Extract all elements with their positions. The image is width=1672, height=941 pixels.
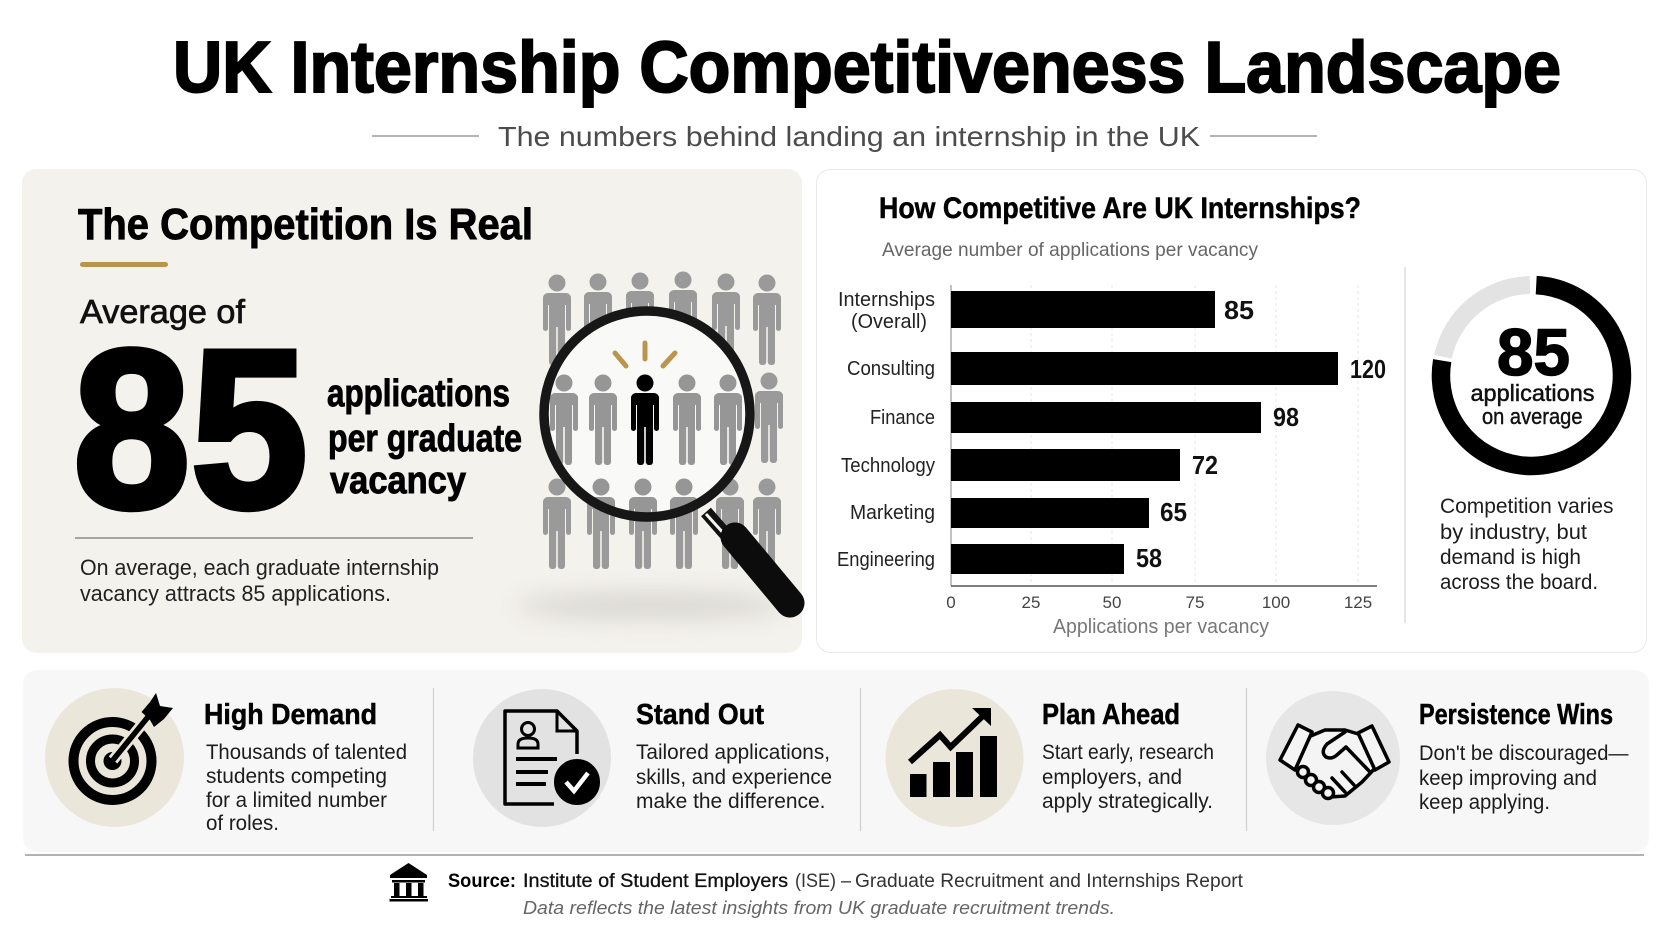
bar chart: 50 xyxy=(1103,593,1121,612)
big number caption: applications xyxy=(327,373,510,415)
donut chart: 85 xyxy=(1497,315,1570,389)
gold accent bar xyxy=(80,262,168,267)
donut note xyxy=(1440,494,1614,594)
takeaway: stand out: Stand Out xyxy=(636,699,764,731)
donut note: demand is high xyxy=(1440,545,1581,569)
illustration: crowd and magnifying glass xyxy=(515,272,790,619)
icon: rising bar chart xyxy=(886,689,1024,827)
source citation: Source: xyxy=(448,871,516,892)
bar chart: 85 xyxy=(1224,295,1254,325)
bar chart: 120 xyxy=(1350,354,1386,384)
takeaway: persistence wins: keep improving and xyxy=(1419,767,1597,790)
icon: resume with check xyxy=(473,689,611,827)
panel description: On average, each graduate internship xyxy=(80,555,439,580)
bar chart: Engineering xyxy=(837,549,935,571)
donut note: Competition varies xyxy=(1440,494,1614,518)
bar chart: 72 xyxy=(1192,450,1218,480)
panel heading: The Competition Is Real xyxy=(78,200,533,249)
icon: handshake xyxy=(1266,691,1400,825)
takeaway: plan ahead: apply strategically. xyxy=(1042,790,1213,813)
bar chart: 98 xyxy=(1273,402,1299,432)
bar chart: 125 xyxy=(1344,593,1372,612)
bar chart xyxy=(837,285,1386,638)
big number 85: 85 xyxy=(73,302,308,555)
takeaway: plan ahead xyxy=(886,689,1214,827)
panel: the competition is real xyxy=(22,169,802,653)
source citation: (ISE) – xyxy=(795,871,851,892)
icon: target with arrow xyxy=(45,688,184,827)
takeaway: persistence wins: Don't be discouraged— xyxy=(1419,742,1628,765)
takeaway: plan ahead: Plan Ahead xyxy=(1042,699,1180,731)
takeaway: high demand: students competing xyxy=(206,765,387,788)
big number caption: per graduate xyxy=(328,418,522,460)
data note: Data reflects the latest insights from UK graduate recruitment trends. xyxy=(523,897,1115,918)
takeaway: persistence wins: keep applying. xyxy=(1419,791,1550,814)
bar chart: 75 xyxy=(1186,593,1204,612)
donut chart xyxy=(1441,285,1622,466)
title: UK Internship Competitiveness Landscape xyxy=(173,28,1561,108)
panel description xyxy=(80,555,439,606)
icon: institution building xyxy=(390,863,428,902)
takeaway: plan ahead: Start early, research xyxy=(1042,741,1214,764)
source citation: Institute of Student Employers xyxy=(523,871,788,892)
donut note: by industry, but xyxy=(1440,520,1587,544)
bar chart: 58 xyxy=(1136,543,1162,573)
donut chart: on average xyxy=(1482,404,1582,429)
source citation: Graduate Recruitment and Internships Report xyxy=(855,871,1244,892)
bar chart: 25 xyxy=(1022,593,1040,612)
donut note: across the board. xyxy=(1440,570,1598,594)
bar chart: Technology xyxy=(841,455,935,477)
chart subheading: Average number of applications per vacancy xyxy=(882,239,1258,261)
bar chart: (Overall) xyxy=(851,311,927,333)
donut chart: applications xyxy=(1470,380,1594,406)
bar chart: Internships xyxy=(838,289,935,311)
takeaway: high demand: for a limited number xyxy=(206,789,387,812)
panel description: vacancy attracts 85 applications. xyxy=(80,581,391,606)
average of label: Average of xyxy=(80,293,246,330)
chart heading: How Competitive Are UK Internships? xyxy=(879,192,1361,225)
bar chart: Marketing xyxy=(850,502,935,524)
panel: key takeaways xyxy=(23,670,1649,852)
bar chart: Consulting xyxy=(847,358,935,380)
takeaway: stand out: Tailored applications, xyxy=(636,741,830,764)
panel: how competitive chart xyxy=(816,170,1646,652)
bar chart: Applications per vacancy xyxy=(1053,616,1269,638)
takeaway: stand out xyxy=(473,689,832,827)
takeaway: high demand: of roles. xyxy=(206,812,279,835)
takeaway: plan ahead: employers, and xyxy=(1042,766,1182,789)
bar chart: Finance xyxy=(870,407,935,429)
bar chart: 0 xyxy=(946,593,956,612)
takeaway: high demand: High Demand xyxy=(204,699,377,731)
takeaway: stand out: make the difference. xyxy=(636,790,826,813)
takeaway: persistence wins xyxy=(1266,691,1628,825)
takeaway: high demand xyxy=(45,688,407,835)
bar chart: 65 xyxy=(1160,497,1187,527)
subtitle: The numbers behind landing an internship in the UK xyxy=(498,121,1200,152)
big number caption xyxy=(327,373,522,502)
takeaway: high demand: Thousands of talented xyxy=(206,741,407,764)
big number caption: vacancy xyxy=(330,460,466,502)
takeaway: stand out: skills, and experience xyxy=(636,766,832,789)
takeaway: persistence wins: Persistence Wins xyxy=(1419,699,1613,731)
bar chart: 100 xyxy=(1262,593,1290,612)
source citation xyxy=(448,871,1244,892)
